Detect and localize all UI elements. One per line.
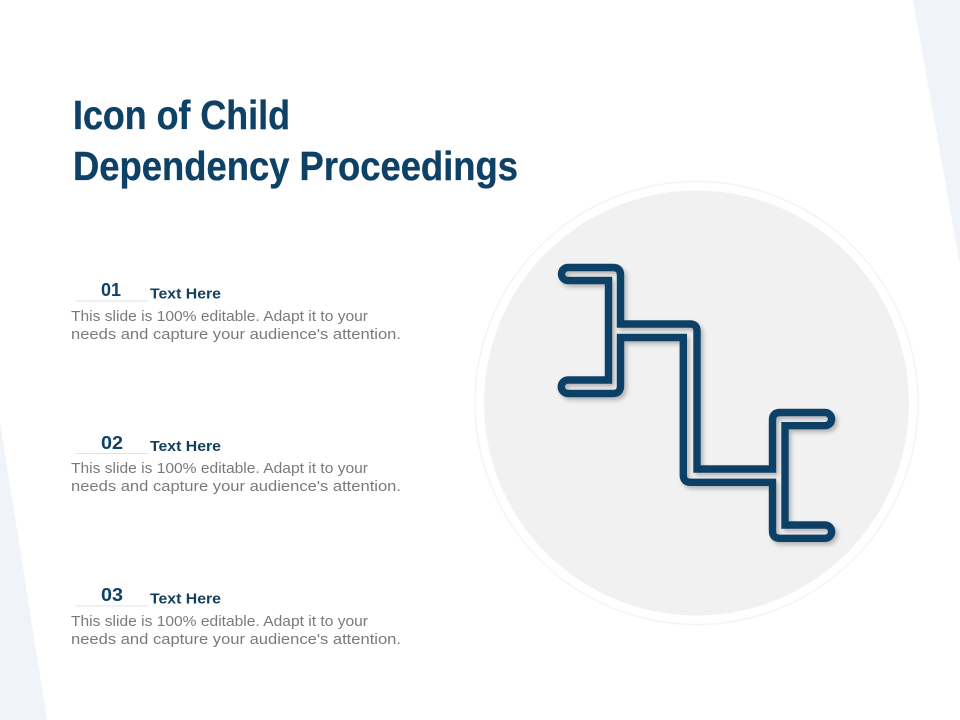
heading 02: Text Here — [150, 438, 221, 455]
item 02 — [71, 432, 401, 495]
number 01: 01 — [101, 279, 121, 300]
item 03 — [71, 584, 401, 648]
description 01: needs and capture your audience's attention. — [71, 327, 401, 343]
description 03: needs and capture your audience's attention. — [71, 632, 401, 648]
description 03 — [71, 614, 401, 648]
circle panel — [475, 182, 918, 624]
description 02: needs and capture your audience's attention. — [71, 479, 401, 495]
description 01: This slide is 100% editable. Adapt it to your — [71, 309, 368, 325]
icon: child dependency bracket connector — [561, 268, 832, 538]
item 01 — [71, 279, 401, 343]
heading 01: Text Here — [150, 286, 221, 302]
background shape: bottom left — [0, 422, 47, 720]
description 02: This slide is 100% editable. Adapt it to your — [71, 461, 368, 477]
description 02 — [71, 461, 401, 495]
title — [73, 92, 518, 189]
background shape: top right — [913, 0, 960, 265]
title: Icon of Child — [73, 92, 290, 138]
title: Dependency Proceedings — [73, 143, 518, 189]
description 03: This slide is 100% editable. Adapt it to your — [71, 614, 368, 630]
number 02: 02 — [101, 432, 123, 453]
description 01 — [71, 309, 401, 343]
number 03: 03 — [101, 584, 123, 605]
heading 03: Text Here — [150, 590, 221, 608]
